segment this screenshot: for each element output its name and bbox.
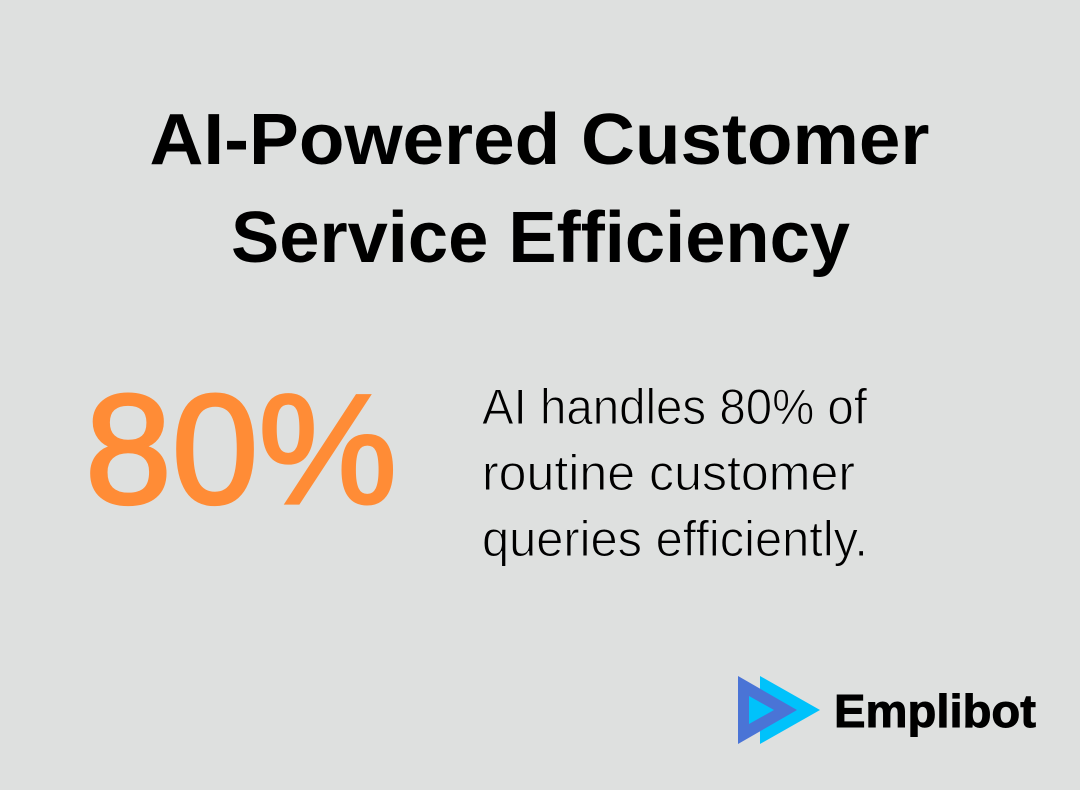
stat description: queries efficiently. xyxy=(482,511,868,567)
icon: double play triangles xyxy=(738,676,820,744)
big stat: 80%: 80% xyxy=(85,363,397,537)
stat description: AI handles 80% of xyxy=(482,379,867,435)
title xyxy=(150,100,930,278)
title: Service Efficiency xyxy=(231,198,850,278)
title: AI-Powered Customer xyxy=(150,100,930,180)
logo wordmark: Emplibot xyxy=(834,685,1036,737)
logo: Emplibot xyxy=(738,676,1036,744)
stat description: routine customer xyxy=(482,445,855,501)
stat description xyxy=(482,379,868,567)
